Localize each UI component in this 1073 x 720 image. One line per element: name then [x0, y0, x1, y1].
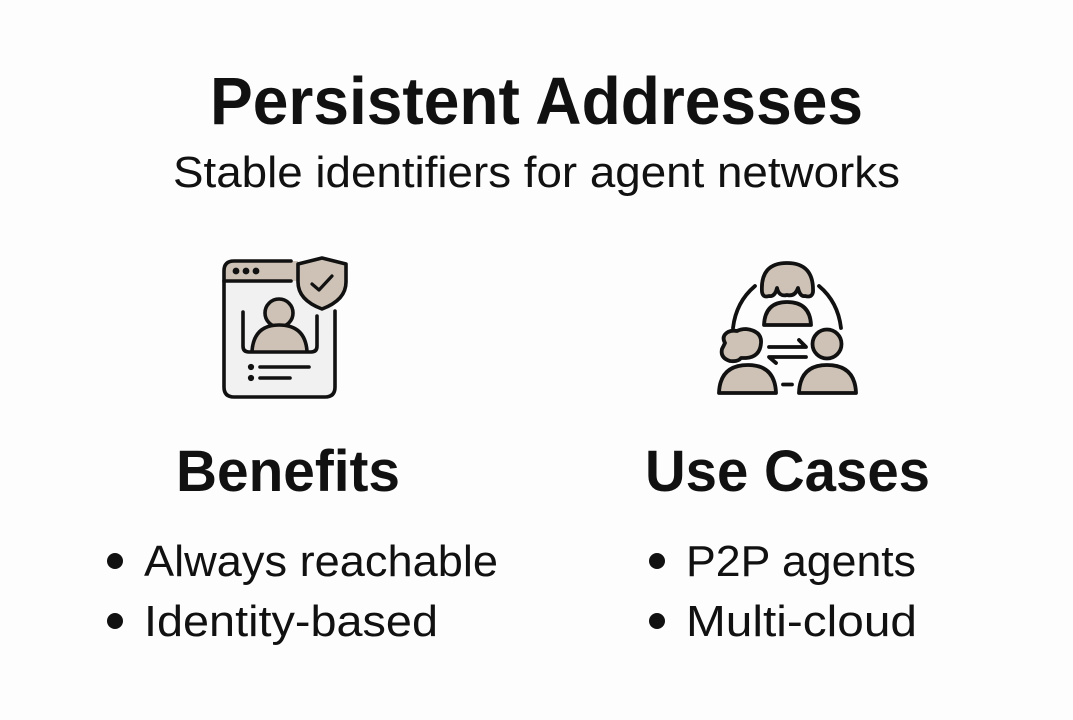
heading: benefits: Benefits [176, 439, 400, 504]
list: benefits: Always reachable [144, 537, 498, 586]
heading: use cases: Use Cases [645, 439, 930, 504]
icon: connected agents [719, 263, 856, 393]
list: use cases [649, 537, 917, 646]
list: benefits: Identity-based [144, 597, 438, 646]
icon: profile window with shield [224, 258, 346, 397]
list: use cases: P2P agents [686, 537, 916, 586]
list: benefits [107, 537, 498, 646]
title: Persistent Addresses [210, 64, 863, 139]
subtitle: Stable identifiers for agent networks [173, 148, 900, 197]
list: use cases: Multi-cloud [686, 597, 917, 646]
